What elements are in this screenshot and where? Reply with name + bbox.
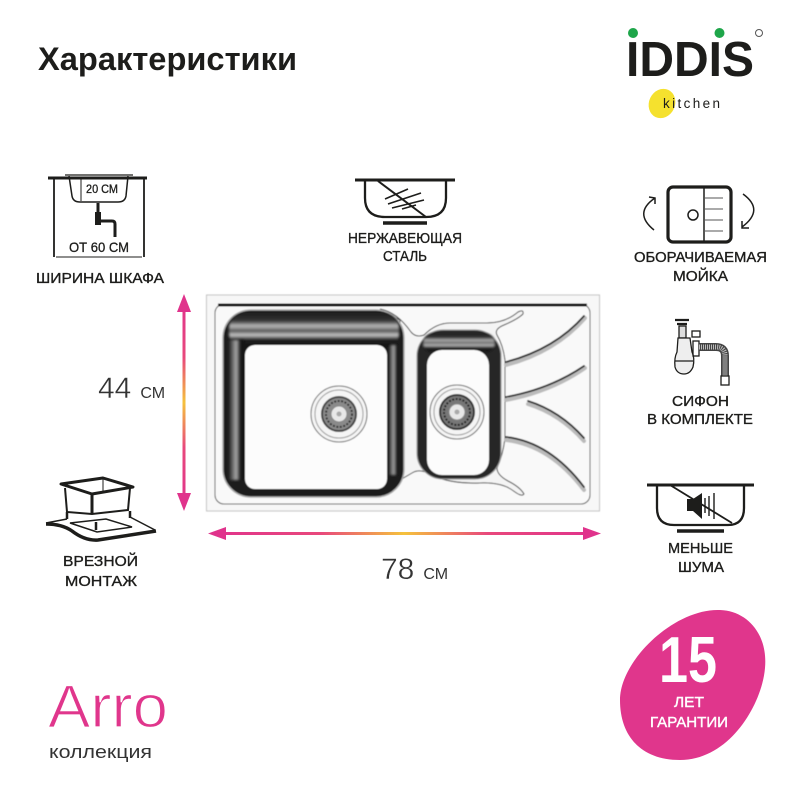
icon: less noise — [647, 485, 754, 531]
title: Характеристики — [38, 41, 297, 77]
dimension: width: 78 СМ — [381, 553, 448, 586]
warranty badge: ЛЕТ — [674, 694, 704, 711]
dimension: height: 44 СМ — [98, 372, 165, 405]
sink rim — [215, 304, 590, 504]
label: 20 cm: 20 СМ — [86, 182, 118, 196]
label: less noise: МЕНЬШЕ — [668, 540, 733, 557]
label: from 60 cm: ОТ 60 СМ — [69, 239, 129, 255]
label: cabinet width: ШИРИНА ШКАФА — [36, 270, 164, 287]
icon: cabinet width — [48, 175, 147, 257]
collection caption: коллекция — [49, 741, 152, 762]
drain small — [430, 385, 484, 439]
arrow: height — [177, 294, 191, 511]
arrow: width — [208, 527, 601, 540]
label: less noise: ШУМА — [678, 559, 724, 576]
label: reversible sink: ОБОРАЧИВАЕМАЯ — [634, 249, 767, 266]
logo: IDDIS kitchen: kitchen — [663, 96, 720, 111]
drain large — [311, 386, 367, 442]
drainboard basin — [380, 309, 524, 495]
label: siphon included: В КОМПЛЕКТЕ — [647, 411, 753, 428]
label: siphon included: СИФОН — [672, 393, 729, 410]
warranty badge: ГАРАНТИИ — [650, 714, 728, 731]
large bowl — [223, 310, 404, 497]
label: inset mounting: ВРЕЗНОЙ — [63, 552, 138, 570]
logo: IDDIS kitchen: IDDIS — [626, 33, 754, 87]
collection name: Arro — [48, 673, 168, 740]
label: reversible sink: МОЙКА — [673, 267, 728, 285]
sink plate — [206, 295, 600, 511]
logo: IDDIS kitchen — [626, 28, 762, 123]
small bowl — [417, 330, 501, 479]
label: inset mounting: МОНТАЖ — [65, 573, 137, 590]
label: stainless steel: НЕРЖАВЕЮЩАЯ — [348, 230, 462, 247]
drainboard grooves — [506, 316, 585, 490]
icon: stainless steel — [355, 180, 455, 223]
warranty badge: 15 — [659, 623, 717, 696]
sink photo illustration — [206, 295, 600, 511]
icon: inset mounting — [46, 478, 156, 540]
warranty badge — [620, 610, 765, 760]
icon: reversible sink — [644, 187, 754, 242]
icon: siphon — [675, 320, 729, 385]
label: stainless steel: СТАЛЬ — [383, 248, 427, 265]
